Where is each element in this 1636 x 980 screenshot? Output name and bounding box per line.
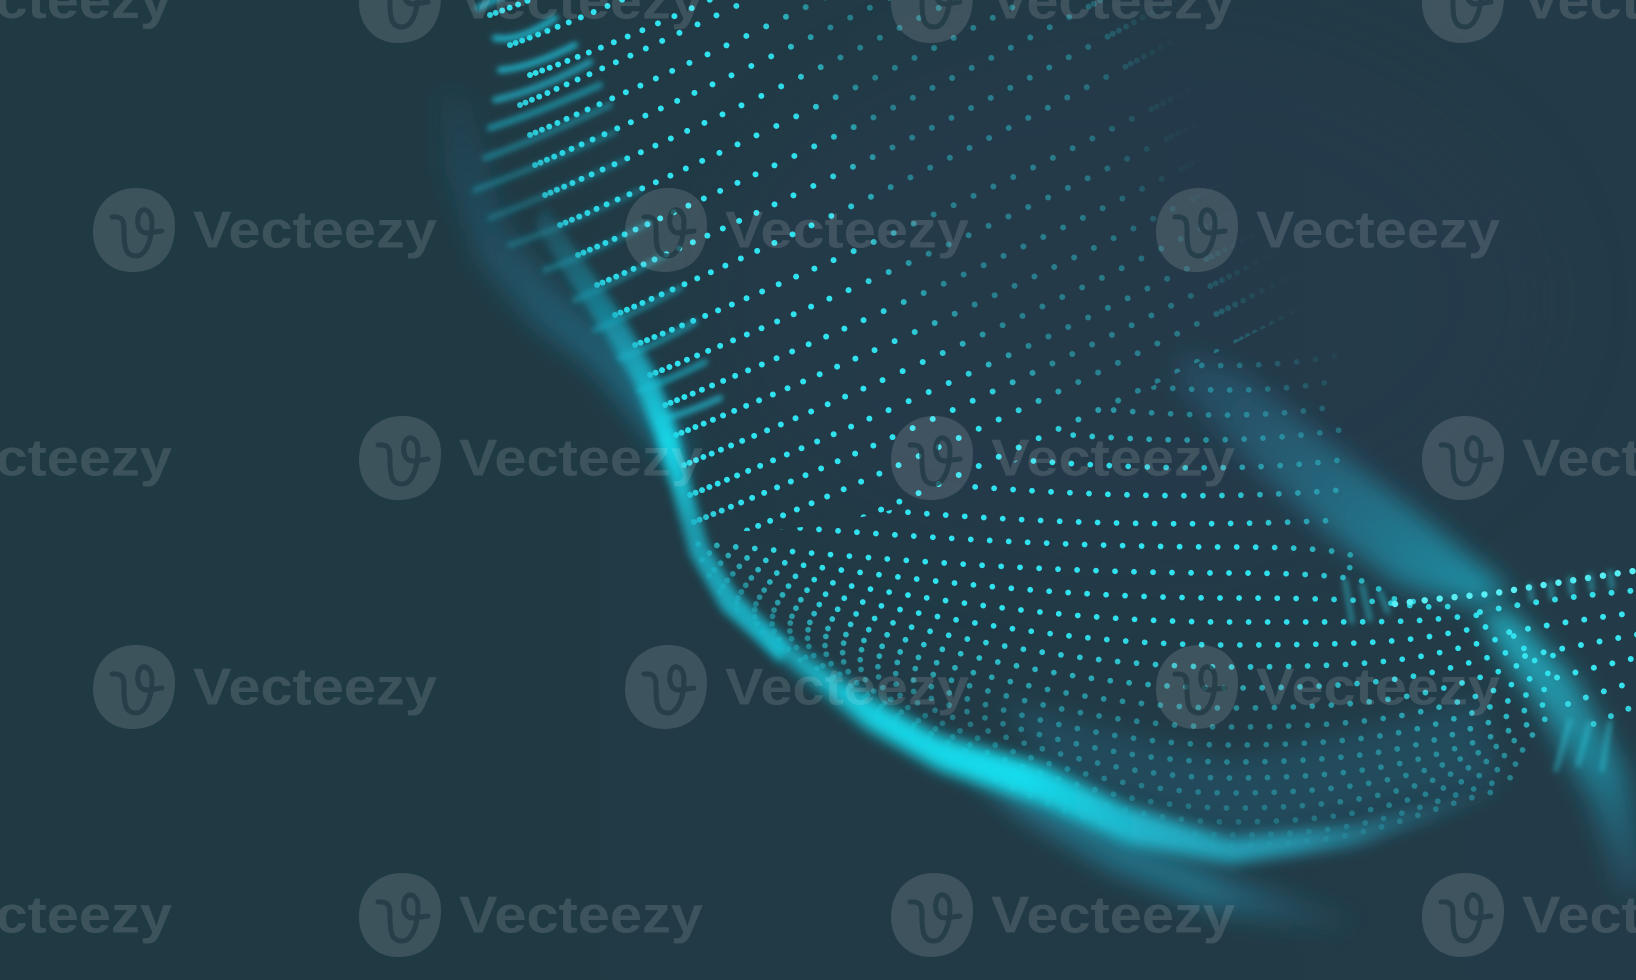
blurred left fringe band (440, 90, 690, 470)
watermark: logo at 400,915 (359, 873, 703, 957)
watermark: logo at 1197,687 (1156, 645, 1500, 729)
watermark: logo at 134,230 (93, 188, 437, 272)
left ridge streaks (475, 0, 720, 420)
watermark: logo at 1463,915 (1422, 873, 1636, 957)
watermark: logo at 134,230: Vecteezy (193, 202, 437, 260)
blurred lower secondary band (960, 765, 1370, 932)
watermark row 1 (0, 0, 1636, 43)
watermark: logo at 1463,1 (1422, 0, 1636, 43)
watermark row 3 (0, 416, 1636, 500)
background glow: upper right blue haze (710, 30, 1550, 570)
watermark: logo at 1197,230 (1156, 188, 1500, 272)
watermark: logo at 400,458: Vecteezy (459, 430, 703, 488)
watermark: logo at 400,458 (359, 416, 703, 500)
watermark: logo at 400,1 (359, 0, 703, 43)
blurred right band (1480, 610, 1636, 900)
left bright ridge (535, 205, 790, 662)
right crest highlight (1395, 570, 1636, 604)
wave: particle surface (440, 0, 1636, 932)
dot rows: upper fan (487, 0, 1284, 532)
watermark: logo at 1463,458 (1422, 416, 1636, 500)
watermark row 5 (0, 873, 1636, 957)
watermark: logo at 134,687 (93, 645, 437, 729)
watermark: logo at 666,230 (625, 188, 969, 272)
watermark: logo at 932,458: Vecteezy (991, 430, 1235, 488)
watermark row 4 (93, 645, 1500, 729)
watermark: logo at 666,230: Vecteezy (725, 202, 969, 260)
watermark: logo at 400,915: Vecteezy (459, 886, 703, 944)
dim curtain glow under the bowl (1000, 700, 1500, 840)
watermark: logo at 1197,230: Vecteezy (1256, 202, 1500, 260)
main bright bottom ridge (760, 625, 1500, 864)
crest vertical streaks (1345, 572, 1612, 770)
blurred upper right band (1178, 352, 1510, 606)
watermark: logo at 1197,687: Vecteezy (1256, 658, 1500, 716)
dot rows: bowl section (696, 330, 1560, 845)
watermark: logo at 932,1 (891, 0, 1235, 43)
watermark: logo at 932,915 (891, 873, 1235, 957)
watermark: logo at 932,915: Vecteezy (991, 886, 1235, 944)
dot rows: right crest section (1480, 590, 1636, 728)
watermark row 2 (93, 188, 1500, 272)
watermark: logo at 666,687: Vecteezy (725, 658, 969, 716)
watermark: logo at 134,687: Vecteezy (193, 658, 437, 716)
watermark: logo at 932,458 (891, 416, 1235, 500)
watermark: logo at 666,687 (625, 645, 969, 729)
